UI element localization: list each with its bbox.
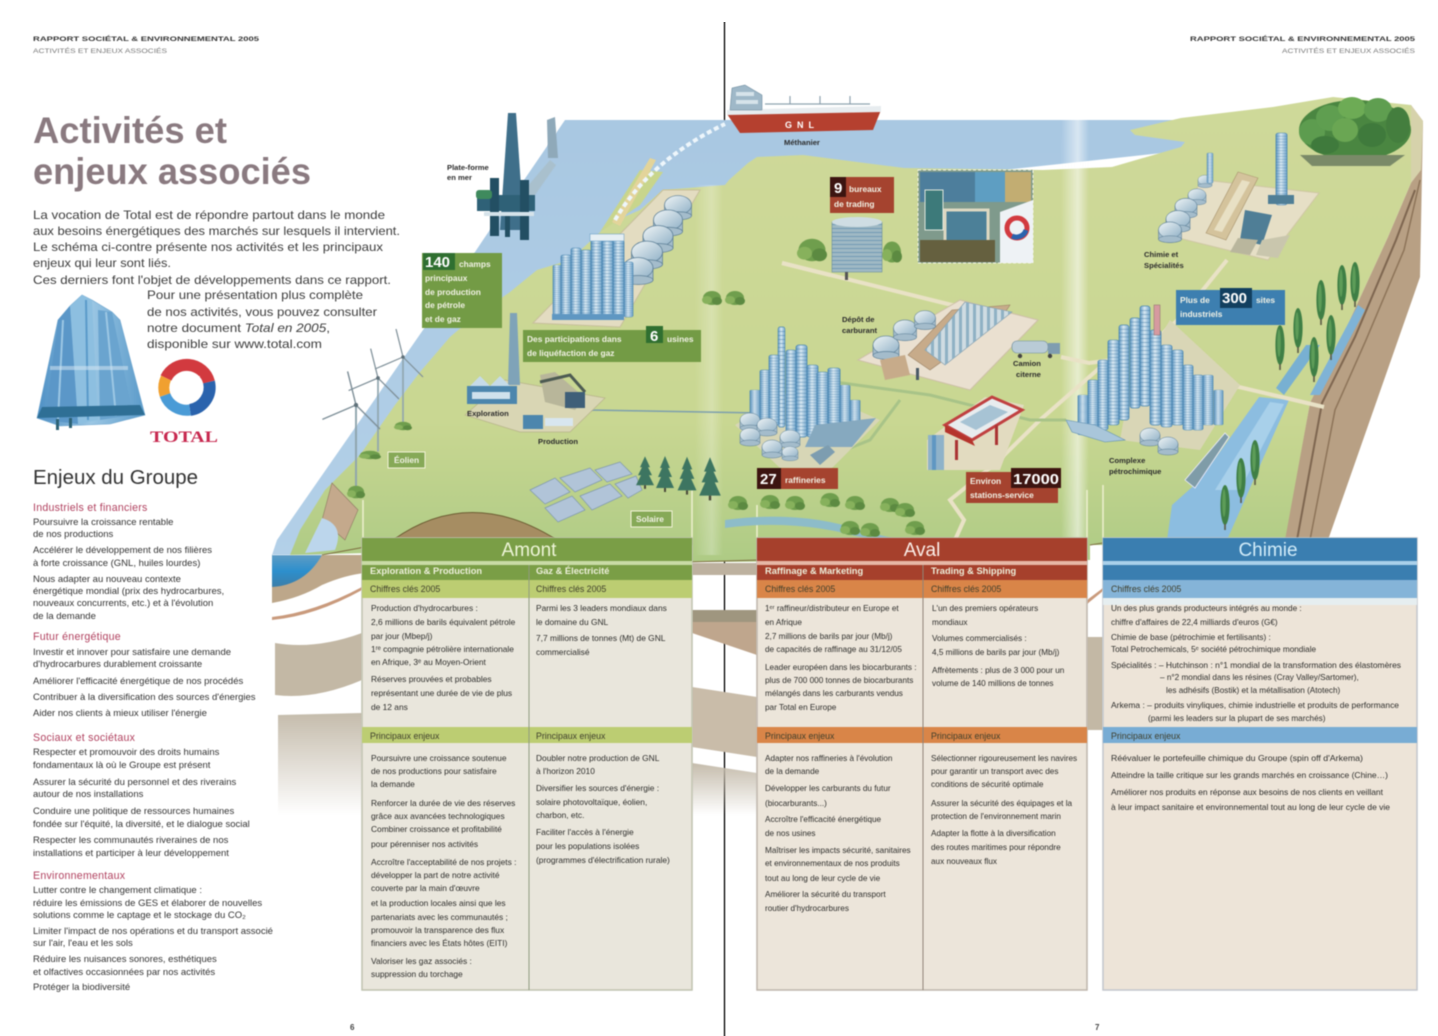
intro text: Pour une présentation plus complète (147, 288, 363, 302)
icon: tanker truck (1012, 341, 1060, 358)
icons: wind turbines (322, 329, 423, 498)
column: Exploration & Production (370, 566, 516, 979)
column: Exploration & Production: par jour (Mbep/j) (371, 631, 433, 641)
icon: Total headquarters tower (37, 295, 145, 430)
callout: 140 champs: de production (425, 287, 481, 297)
column: Raffinage & Marketing: de capacités de raffinage au 31/12/05 (765, 645, 902, 654)
column: Trading & Shipping: pour garantir un transport avec des (931, 767, 1058, 776)
icon: Total logo: TOTAL (150, 429, 218, 446)
callout: Éolien (388, 452, 425, 468)
running header: right page: RAPPORT SOCIÉTAL & ENVIRONNEMENTAL 2005 (1190, 34, 1415, 43)
light strips (1061, 120, 1089, 540)
column: Raffinage & Marketing: plus de 700 000 tonnes de biocarburants (765, 676, 913, 685)
land (290, 97, 1411, 562)
section: Environnementaux: réduire les émissions de GES et élaborer de nouvelles (33, 898, 262, 909)
icon: fir trees (636, 456, 721, 500)
column: Raffinage & Marketing: Améliorer la sécurité du transport (765, 890, 886, 899)
panel: Amont (362, 538, 692, 990)
centre page fold line (724, 22, 726, 1036)
label: Dépôt de carburant: carburant (842, 326, 877, 335)
callout: 17000 stations-service: stations-service (970, 490, 1034, 500)
column: Gaz & Électricité: commercialisé (536, 647, 590, 657)
column: Exploration & Production: Réserves prouvées et probables (371, 674, 492, 684)
column: Raffinage & Marketing: Accroître l'efficacité énergétique (765, 815, 882, 824)
intro text: notre document Total en 2005 , (147, 321, 330, 335)
column: Trading & Shipping: Volumes commercialisés : (932, 634, 1027, 643)
label: Complexe pétrochimique: pétrochimique (1109, 467, 1161, 476)
column: Trading & Shipping: Principaux enjeux (931, 731, 1001, 741)
column: Gaz & Électricité: pour les populations isolées (536, 841, 639, 851)
column: Trading & Shipping: Affrètements : plus de 3 000 pour un (932, 666, 1065, 675)
section: Futur énergétique (33, 631, 256, 719)
column: Exploration & Production: Exploration & Production (370, 566, 482, 576)
icon: LNG tanker: GNL (785, 120, 819, 130)
column: Raffinage & Marketing: Développer les carburants du futur (765, 784, 891, 793)
section: Industriels et financiers: Nous adapter au nouveau contexte (33, 574, 181, 585)
section: Environnementaux: Protéger la biodiversité (33, 982, 130, 993)
section: Industriels et financiers: Industriels et financiers (33, 502, 148, 514)
intro text: Ces derniers font l'objet de développements dans ce rapport. (33, 273, 391, 287)
column: Exploration & Production: la demande (371, 779, 415, 789)
callout: Éolien: Éolien (394, 454, 419, 465)
section: Environnementaux: Limiter l'impact de nos opérations et du transport associé (33, 926, 273, 937)
title (33, 109, 311, 192)
section: Sociaux et sociétaux: Respecter et promouvoir des droits humains (33, 747, 220, 758)
column: Gaz & Électricité: Diversifier les sources d'énergie : (536, 783, 659, 793)
column: Exploration & Production: de 12 ans (371, 702, 408, 712)
running header: right page (1190, 34, 1415, 55)
callout: 300 sites industriels: industriels (1180, 309, 1223, 319)
column: Gaz & Électricité: Faciliter l'accès à l'énergie (536, 827, 634, 837)
text: key figures: Un des plus grands producteurs intégrés au monde : (1111, 604, 1302, 613)
callout: 9 bureaux de trading: de trading (834, 199, 874, 209)
column: Exploration & Production: Valoriser les gaz associés : (371, 956, 472, 966)
section: Sociaux et sociétaux (33, 732, 250, 859)
text: key figures: Total Petrochemicals, 5ᵉ société pétrochimique mondiale (1111, 645, 1317, 654)
callout: 6 usines de liquéfaction: de liquéfaction de gaz (527, 348, 614, 358)
page number 7: 7 (1095, 1023, 1100, 1032)
section: Industriels et financiers: de nos productions (33, 529, 114, 540)
cliff (1285, 105, 1423, 540)
column: Gaz & Électricité (536, 566, 670, 865)
callout: 140 champs: 140 (425, 254, 450, 271)
callout: 6 usines de liquéfaction: Des participations dans (527, 334, 622, 344)
section: Sociaux et sociétaux: installations et participer à leur développement (33, 848, 229, 859)
intro text: aux besoins énergétiques des marchés sur lesquels il intervient. (33, 224, 400, 238)
geological strata cross-section (272, 555, 1103, 815)
text: key figures: – n°2 mondial dans les résines (Cray Valley/Sartomer), (1160, 673, 1359, 682)
label: Camion citerne: Camion (1013, 359, 1041, 368)
label: Plate-forme en mer: en mer (447, 173, 472, 182)
column: Exploration & Production: Combiner croissance et profitabilité (371, 824, 502, 834)
column: Raffinage & Marketing: par Total en Europe (765, 703, 837, 712)
heading: Aval: Aval (904, 540, 940, 561)
section: Industriels et financiers: à forte croissance (GNL, huiles lourdes) (33, 558, 200, 569)
column: Gaz & Électricité: (programmes d'électrification rurale) (536, 855, 670, 865)
column: Trading & Shipping: Assurer la sécurité des équipages et la (931, 799, 1073, 808)
text: main challenges: Améliorer nos produits en réponse aux besoins de nos clients en veillant (1111, 788, 1384, 797)
section: Sociaux et sociétaux: fondée sur l'équité, la diversité, et le dialogue social (33, 819, 250, 830)
column: Trading & Shipping: Chiffres clés 2005 (931, 584, 1001, 594)
column: Trading & Shipping: protection de l'environnement marin (931, 812, 1061, 821)
icon: solar panels (530, 462, 642, 522)
text: main challenges: à leur impact sanitaire et environnemental tout au long de leur cycle de vie (1111, 803, 1390, 812)
text: main challenges: Principaux enjeux (1111, 731, 1181, 741)
label: Chimie et Spécialités: Chimie et (1144, 250, 1179, 259)
text: key figures: Spécialités : – Hutchinson : n°1 mondial de la transformation des élastomères (1111, 661, 1401, 670)
column: Raffinage & Marketing: de nos usines (765, 829, 816, 838)
column: Exploration & Production: suppression du torchage (371, 969, 463, 979)
column: Trading & Shipping: 4,5 millions de barils par jour (Mb/j) (932, 648, 1060, 657)
icon: petrochemical complex (1066, 305, 1240, 455)
label: Méthanier: Méthanier (784, 138, 820, 147)
section: Environnementaux: Lutter contre le changement climatique : (33, 885, 202, 896)
callout: 27 raffineries: raffineries (785, 475, 826, 485)
callout: Solaire (631, 511, 672, 527)
icon: chemical and specialties plant (1158, 133, 1319, 260)
section: Futur énergétique: Futur énergétique (33, 631, 121, 643)
inset: trading room (918, 170, 1033, 263)
panel: Aval (757, 538, 1087, 990)
title: enjeux associés (33, 150, 311, 192)
column: Trading & Shipping: L'un des premiers opérateurs (932, 604, 1038, 613)
column: Raffinage & Marketing: 2,7 millions de barils par jour (Mb/j) (765, 632, 893, 641)
intro text: enjeux qui leur sont liés. (33, 256, 171, 270)
column: Exploration & Production: et la production locales ainsi que les (371, 898, 506, 908)
column: Exploration & Production: pour pérenniser nos activités (371, 839, 478, 849)
column: Gaz & Électricité: Parmi les 3 leaders mondiaux dans (536, 603, 667, 613)
column: Exploration & Production: Principaux enjeux (370, 731, 440, 741)
column: Raffinage & Marketing (765, 566, 917, 913)
column: Raffinage & Marketing: Principaux enjeux (765, 731, 835, 741)
list: group stakes (33, 502, 273, 993)
icon: refinery (735, 327, 880, 470)
text: key figures: Chiffres clés 2005 (1111, 584, 1181, 594)
section: Futur énergétique: d'hydrocarbures durablement croissante (33, 659, 202, 670)
column: Exploration & Production: développer la part de notre activité (371, 870, 500, 880)
running header: left page: RAPPORT SOCIÉTAL & ENVIRONNEMENTAL 2005 (33, 34, 259, 43)
column: Trading & Shipping (931, 566, 1077, 866)
column: Gaz & Électricité: à l'horizon 2010 (536, 766, 595, 776)
intro text: de nos activités, vous pouvez consulter (147, 305, 377, 319)
column: Gaz & Électricité: solaire photovoltaïque, éolien, (536, 797, 647, 807)
column: Exploration & Production: Poursuivre une croissance soutenue (371, 753, 507, 763)
icon: fuel depot (858, 300, 1038, 390)
callout: 6 usines de liquéfaction: 6 (650, 328, 658, 345)
icon: hydro dam (305, 483, 358, 553)
icon: service station (927, 397, 1024, 470)
column: Exploration & Production: couverte par la main d'œuvre (371, 883, 480, 893)
label: Dépôt de carburant: Dépôt de (842, 315, 874, 324)
column: Gaz & Électricité: le domaine du GNL (536, 617, 609, 627)
label: Exploration: Exploration (467, 409, 509, 418)
column: Exploration & Production: partenariats avec les communautés ; (371, 912, 508, 922)
intro text: Le schéma ci-contre présente nos activités et les principaux (33, 240, 383, 254)
callout: 300 sites industriels: Plus de (1180, 295, 1210, 305)
section: Industriels et financiers: énergétique mondial (prix des hydrocarbures, (33, 586, 224, 597)
callout: 140 champs (422, 253, 502, 328)
text: key figures: les adhésifs (Bostik) et la métallisation (Atotech) (1166, 686, 1341, 695)
column: Exploration & Production: financiers avec les États hôtes (EITI) (371, 938, 508, 948)
column: Raffinage & Marketing: tout au long de leur cycle de vie (765, 874, 881, 883)
icon: office building (797, 217, 902, 280)
intro text: disponible sur www.total.com (147, 337, 322, 351)
callout: 140 champs: et de gaz (425, 314, 461, 324)
column: Raffinage & Marketing: et environnementaux de nos produits (765, 859, 900, 868)
column: Exploration & Production: 2,6 millions de barils équivalent pétrole (371, 617, 516, 627)
panel: Chimie (1103, 538, 1417, 990)
column: Trading & Shipping: Sélectionner rigoureusement les navires (931, 754, 1077, 763)
callout: 140 champs: champs (459, 259, 491, 269)
column: Raffinage & Marketing: Leader européen dans les biocarburants : (765, 663, 917, 672)
icon: offshore platform (476, 113, 558, 240)
column: Exploration & Production: Renforcer la durée de vie des réserves (371, 798, 515, 808)
callout: 17000 stations-service: Environ (970, 476, 1001, 486)
section: Sociaux et sociétaux: Sociaux et sociétaux (33, 732, 136, 744)
section: Futur énergétique: Améliorer l'efficacité énergétique de nos procédés (33, 676, 243, 687)
label: Chimie et Spécialités (1144, 250, 1184, 270)
callout: 17000 stations-service: 17000 (1013, 471, 1059, 488)
running header: left page: ACTIVITÉS ET ENJEUX ASSOCIÉS (33, 46, 167, 55)
pipeline (590, 410, 760, 413)
heading: Aval (757, 538, 1087, 561)
icon: forest (1299, 97, 1411, 166)
icon: LNG tanker (727, 85, 881, 133)
hill (393, 512, 557, 540)
callout: 6 usines de liquéfaction: usines (667, 334, 694, 344)
column: Raffinage & Marketing: Adapter nos raffineries à l'évolution (765, 754, 893, 763)
column: Trading & Shipping: Adapter la flotte à la diversification (931, 829, 1056, 838)
icon: LNG plant (533, 124, 725, 327)
column: Exploration & Production: de nos productions pour satisfaire (371, 766, 497, 776)
column: Trading & Shipping: aux nouveaux flux (931, 857, 997, 866)
section: Environnementaux: Réduire les nuisances sonores, esthétiques (33, 954, 217, 965)
label: Plate-forme en mer: Plate-forme (447, 163, 489, 172)
title: Activités et (33, 109, 227, 151)
text: key figures: Chimie de base (pétrochimie et fertilisants) : (1111, 633, 1271, 642)
running header: right page: ACTIVITÉS ET ENJEUX ASSOCIÉS (1282, 46, 1415, 55)
column: Gaz & Électricité: Gaz & Électricité (536, 566, 609, 576)
text: main challenges (1111, 731, 1390, 812)
column: Exploration & Production: Accroître l'acceptabilité de nos projets : (371, 857, 516, 867)
text: key figures: chiffre d'affaires de 22,4 milliards d'euros (G€) (1111, 618, 1278, 627)
section: Sociaux et sociétaux: fondamentaux là où le Groupe est présent (33, 760, 211, 771)
roads (782, 260, 1324, 540)
section: Industriels et financiers: nouveaux concurrents, etc.) et à l'évolution (33, 598, 213, 609)
callout: 6 usines de liquéfaction (523, 326, 701, 362)
sea (272, 120, 1190, 555)
section: Environnementaux: et olfactives occasionnées par nos activités (33, 967, 215, 978)
column: Exploration & Production: en Afrique, 3ᵉ au Moyen-Orient (371, 657, 487, 667)
callout: 140 champs: principaux (425, 273, 468, 283)
section: Environnementaux: Environnementaux (33, 870, 126, 882)
column: Gaz & Électricité: charbon, etc. (536, 810, 584, 820)
column: Raffinage & Marketing: Chiffres clés 2005 (765, 584, 835, 594)
callout: 300 sites industriels (1176, 288, 1285, 325)
group: bottom bushes and trees (702, 291, 925, 537)
icon: cypress trees (1220, 262, 1360, 530)
section: Environnementaux (33, 870, 273, 993)
callout: 140 champs: de pétrole (425, 300, 465, 310)
label: Camion citerne (1013, 359, 1041, 379)
column: Exploration & Production: représentant une durée de vie de plus (371, 688, 512, 698)
table connector lines (363, 485, 1103, 538)
column: Exploration & Production: promouvoir la transparence des flux (371, 925, 505, 935)
stream (725, 517, 900, 540)
column: Raffinage & Marketing: mélangés dans les carburants vendus (765, 689, 903, 698)
column: Exploration & Production: Chiffres clés 2005 (370, 584, 440, 594)
section: Futur énergétique: Aider nos clients à mieux utiliser l'énergie (33, 708, 207, 719)
column: Raffinage & Marketing: routier d'hydrocarbures (765, 904, 849, 913)
callout: 27 raffineries (757, 468, 838, 489)
heading: Chimie (1103, 538, 1417, 561)
callout: 300 sites industriels: 300 (1222, 290, 1247, 307)
column: Gaz & Électricité: Doubler notre production de GNL (536, 753, 660, 763)
text: key figures: (parmi les leaders sur la plupart de ses marchés) (1148, 714, 1326, 723)
column: Trading & Shipping: Trading & Shipping (931, 566, 1017, 576)
scene: landscape (272, 97, 1423, 562)
label: Production: Production (538, 437, 578, 446)
ground line (322, 543, 1103, 562)
column: Gaz & Électricité: 7,7 millions de tonnes (Mt) de GNL (536, 633, 666, 643)
text: key figures: Arkema : – produits vinyliques, chimie industrielle et produits de performance (1111, 701, 1399, 710)
column: Exploration & Production: Production d'hydrocarbures : (371, 603, 478, 613)
text: main challenges: Réévaluer le portefeuille chimique du Groupe (spin off d'Arkema) (1111, 754, 1363, 763)
section: Sociaux et sociétaux: Assurer la sécurité du personnel et des riverains (33, 777, 237, 788)
label: Dépôt de carburant (842, 315, 877, 335)
column: Raffinage & Marketing: 1ᵉʳ raffineur/distributeur en Europe et (765, 604, 899, 613)
section: Environnementaux: sur l'air, l'eau et les sols (33, 938, 133, 949)
text: main challenges: Atteindre la taille critique sur les grands marchés en croissance (Chine…) (1111, 771, 1388, 780)
column: Raffinage & Marketing: de la demande (765, 767, 820, 776)
section: Futur énergétique: Contribuer à la diversification des sources d'énergies (33, 692, 256, 703)
column: Raffinage & Marketing: Maîtriser les impacts sécurité, sanitaires (765, 846, 911, 855)
label: Chimie et Spécialités: Spécialités (1144, 261, 1184, 270)
callout: 17000 stations-service (966, 468, 1061, 503)
column: Raffinage & Marketing: (biocarburants...) (765, 799, 827, 808)
column: Exploration & Production: 1ʳᵉ compagnie pétrolière internationale (371, 644, 514, 654)
heading: Amont: Amont (502, 540, 557, 561)
column: Trading & Shipping: mondiaux (932, 618, 968, 627)
section: Environnementaux: solutions comme le captage et le stockage du CO₂ (33, 910, 246, 921)
label: Complexe pétrochimique (1109, 456, 1161, 476)
running header: left page (33, 34, 259, 55)
heading: Enjeux du Groupe: Enjeux du Groupe (33, 466, 198, 489)
section: Futur énergétique: Investir et innover pour satisfaire une demande (33, 647, 231, 658)
heading: Chimie: Chimie (1238, 540, 1298, 561)
callout: 9 bureaux de trading (830, 177, 894, 213)
intro text (33, 208, 400, 351)
text: key figures (1111, 584, 1401, 723)
column: Exploration & Production: grâce aux avancées technologiques (371, 811, 505, 821)
column: Gaz & Électricité: Chiffres clés 2005 (536, 584, 606, 594)
intro text: La vocation de Total est de répondre partout dans le monde (33, 208, 385, 222)
callout: 27 raffineries: 27 (760, 471, 777, 488)
section: Sociaux et sociétaux: autour de nos installations (33, 789, 144, 800)
column: Trading & Shipping: volume de 140 millions de tonnes (932, 679, 1054, 688)
page number 6: 6 (350, 1023, 355, 1032)
callout: 300 sites industriels: sites (1256, 295, 1275, 305)
section: Sociaux et sociétaux: Conduire une politique de ressources humaines (33, 806, 234, 817)
section: Industriels et financiers: Accélérer le développement de nos filières (33, 545, 212, 556)
callout: Solaire: Solaire (636, 514, 664, 524)
section: Industriels et financiers (33, 502, 224, 622)
section: Industriels et financiers: Poursuivre la croissance rentable (33, 517, 173, 528)
label: Plate-forme en mer (447, 163, 489, 182)
heading: Amont (362, 538, 692, 561)
icon: Total logo (150, 365, 218, 446)
column: Trading & Shipping: des routes maritimes pour répondre (931, 843, 1061, 852)
callout: 9 bureaux de trading: bureaux (849, 184, 882, 194)
column: Raffinage & Marketing: Raffinage & Marketing (765, 566, 863, 576)
callout: 9 bureaux de trading: 9 (834, 180, 842, 197)
label: Camion citerne: citerne (1016, 370, 1041, 379)
column: Gaz & Électricité: Principaux enjeux (536, 731, 606, 741)
canal and river (1167, 305, 1365, 540)
label: Complexe pétrochimique: Complexe (1109, 456, 1145, 465)
section: Industriels et financiers: de la demande (33, 611, 96, 622)
icon: exploration and production site (465, 313, 605, 432)
column: Raffinage & Marketing: en Afrique (765, 618, 802, 627)
column: Trading & Shipping: conditions de sécurité optimale (931, 780, 1044, 789)
section: Sociaux et sociétaux: Respecter les communautés riveraines de nos (33, 835, 229, 846)
